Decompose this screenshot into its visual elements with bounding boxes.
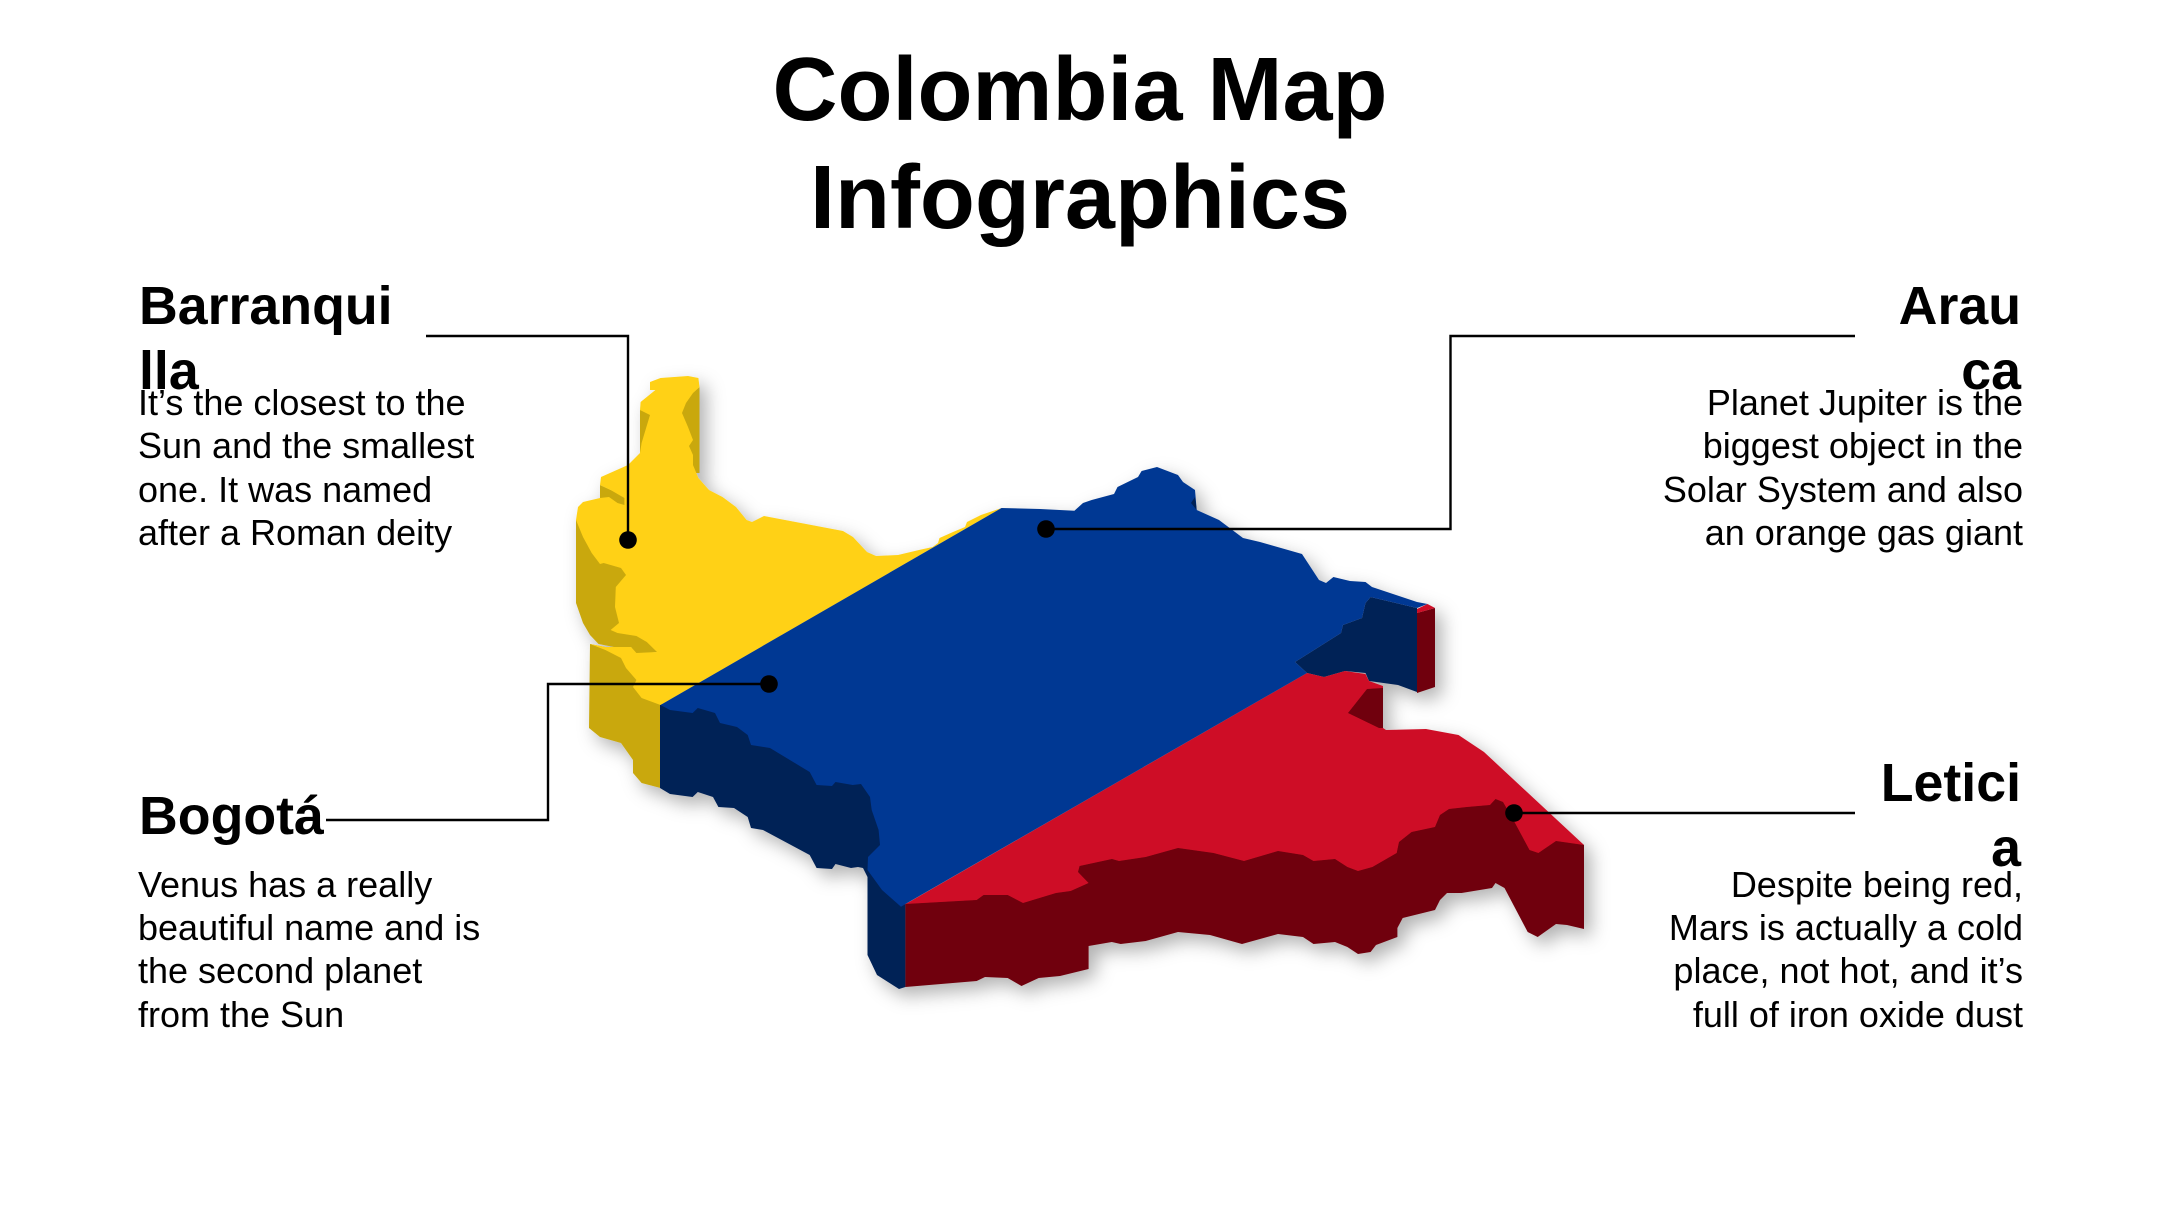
text: Leticia description: place, not hot, and it’s <box>1673 950 2023 991</box>
heading: Barranquilla <box>139 276 393 401</box>
text: Arauca description: Planet Jupiter is the <box>1707 382 2023 423</box>
text: Leticia description: Mars is actually a cold <box>1669 907 2023 948</box>
text: Bogotá description: from the Sun <box>138 994 344 1035</box>
text: Leticia description: full of iron oxide dust <box>1693 994 2023 1035</box>
leader: Barranquilla <box>426 336 637 549</box>
text: Bogotá description <box>138 864 480 1035</box>
text: Bogotá description: Venus has a really <box>138 864 432 904</box>
title: Colombia Map <box>772 40 1388 140</box>
map: 3D Colombia in flag colours <box>576 376 1584 989</box>
heading: Bogotá: Bogotá <box>139 786 324 846</box>
text: Bogotá description: the second planet <box>138 950 422 991</box>
text: Barranquilla description: after a Roman deity <box>138 512 452 553</box>
callout: Bogotá <box>138 786 480 1035</box>
leader: Arauca <box>1037 336 1855 538</box>
text: Arauca description: an orange gas giant <box>1705 512 2023 553</box>
title: Infographics <box>810 148 1350 248</box>
callout: Arauca <box>1663 276 2023 553</box>
blue top surface <box>660 467 1428 907</box>
small blue shadow fleck <box>1191 497 1197 510</box>
text: Arauca description: biggest object in the <box>1703 425 2023 466</box>
text: Bogotá description: beautiful name and is <box>138 907 480 948</box>
text: Barranquilla description: It’s the closest to the <box>138 382 466 423</box>
red top surface <box>901 671 1584 907</box>
text: Barranquilla description: Sun and the smallest <box>138 425 474 466</box>
dark red extruded wall <box>905 780 1584 987</box>
text: Barranquilla description <box>138 382 474 553</box>
title <box>772 40 1388 248</box>
heading: Leticia <box>1881 753 2022 878</box>
heading: Leticia: Letici <box>1881 753 2021 813</box>
heading: Arauca: ca <box>1961 341 2021 401</box>
heading: Barranquilla: Barranqui <box>139 276 393 336</box>
heading: Arauca <box>1899 276 2022 401</box>
red notch wall <box>1348 688 1383 728</box>
callout: Leticia <box>1669 753 2023 1035</box>
heading: Leticia: a <box>1991 818 2021 878</box>
red east tip <box>1417 604 1435 613</box>
dark red east end wall <box>1417 608 1435 693</box>
dark blue east wall <box>1295 597 1417 692</box>
callout: Barranquilla <box>138 276 474 553</box>
heading: Arauca: Arau <box>1899 276 2021 336</box>
leader: Leticia <box>1505 804 1855 822</box>
leader: Bogotá <box>326 675 778 820</box>
yellow top surface <box>576 376 1002 705</box>
text: Leticia description <box>1669 864 2023 1035</box>
heading: Barranquilla: lla <box>139 341 199 401</box>
text: Arauca description: Solar System and also <box>1663 469 2023 510</box>
dark blue extruded wall <box>660 690 1000 989</box>
text: Arauca description <box>1663 382 2023 553</box>
text: Barranquilla description: one. It was named <box>138 469 432 510</box>
text: Leticia description: Despite being red, <box>1731 864 2023 904</box>
yellow extruded wall <box>576 387 700 788</box>
